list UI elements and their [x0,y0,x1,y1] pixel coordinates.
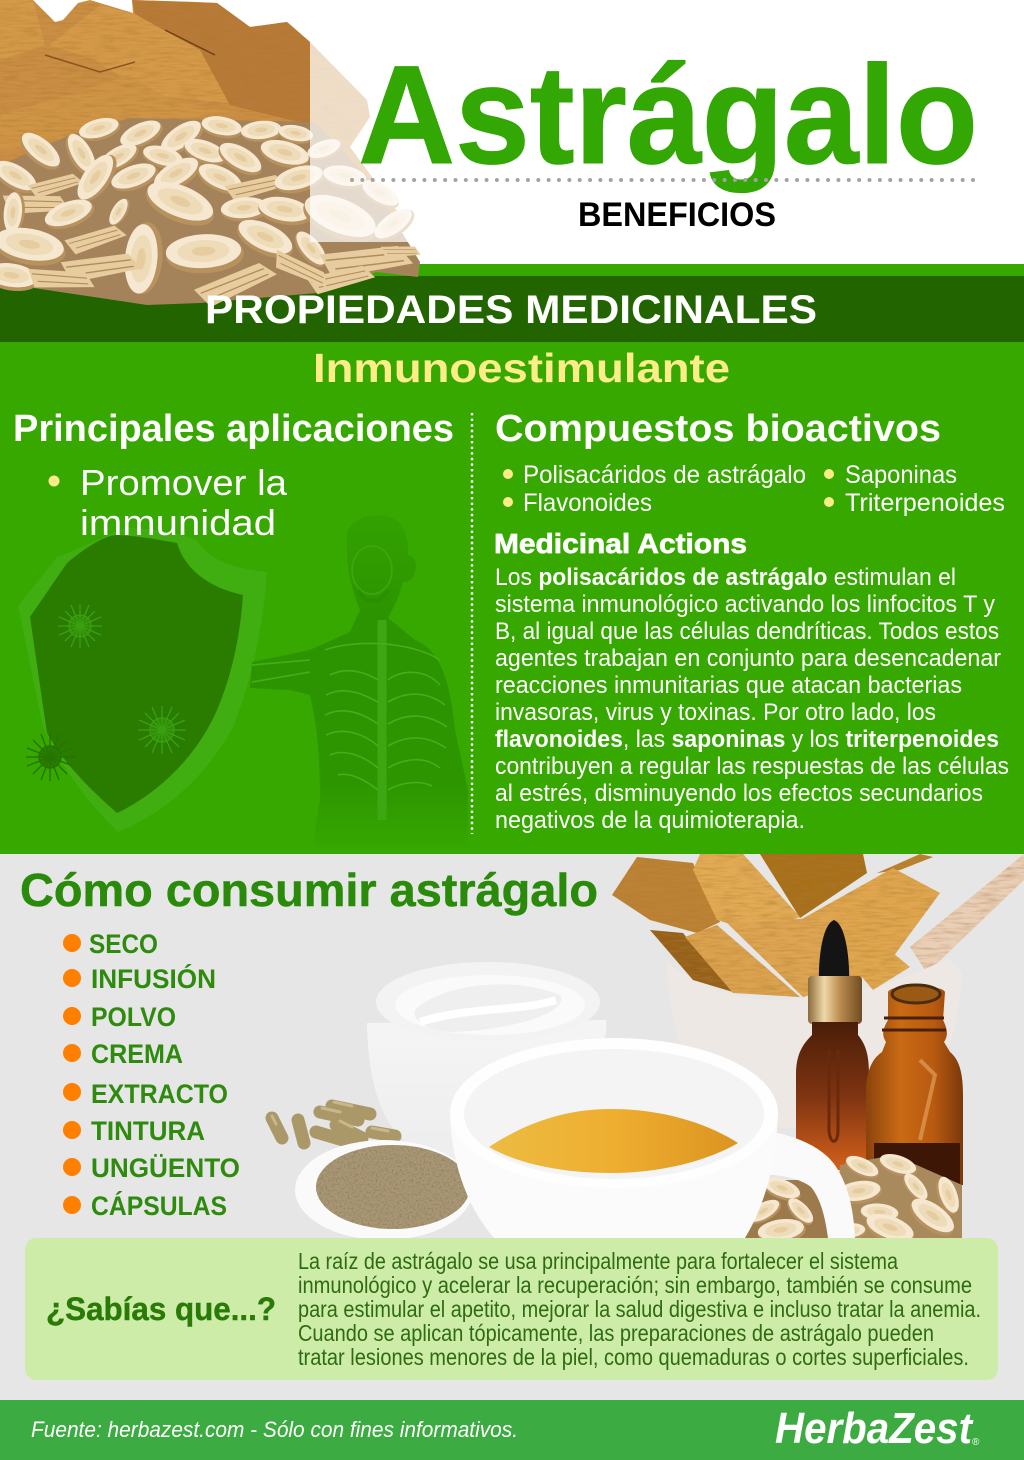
logo: herbazest: HerbaZest [775,1404,974,1453]
medicinal actions text: reacciones inmunitarias que atacan bacterias [495,672,962,699]
footer [0,1400,1024,1460]
bowl of powder [295,1140,473,1240]
application text: Promover la [80,462,288,503]
compound list: Polisacáridos de astrágalo [523,461,806,489]
mortar [667,958,962,1128]
bullet [48,476,60,486]
panel: principales aplicaciones [13,408,468,850]
list: forms of consumption: POLVO [91,1002,176,1032]
application text: immunidad [80,502,276,543]
green section background [0,264,1024,854]
subheading: inmunoestimulante: Inmunoestimulante [313,345,730,391]
amber dropper bottle [796,920,869,1170]
list: forms of consumption: TINTURA [91,1116,205,1146]
photo: astragalus bark and root slices [0,0,440,310]
medicinal actions text: sistema inmunológico activando los linfocitos T y [495,591,995,618]
list: forms of consumption: SECO [89,929,158,959]
dotted rule under title [352,178,976,182]
subtitle: BENEFICIOS [578,196,776,234]
source: Fuente: herbazest.com - Sólo con fines informativos. [31,1417,518,1442]
illustration: shield and viruses [18,528,267,832]
compound list: Saponinas [845,461,957,489]
heading: como consumir: Cómo consumir astrágalo [20,864,598,916]
list: forms of consumption [63,929,240,1221]
section background: como consumir [0,854,1024,1400]
compound list: Flavonoides [523,489,652,517]
compound list: Triterpenoides [845,489,1005,517]
title: Astrágalo [358,36,978,193]
cream jar [367,962,606,1160]
cup handle [738,1133,855,1238]
list: forms of consumption: UNGÜENTO [91,1153,240,1183]
panel: compuestos bioactivos [494,408,1009,834]
medicinal actions text: al estrés, disminuyendo los efectos secundarios [495,780,983,807]
medicinal actions heading: Medicinal Actions [494,528,747,559]
bark pieces [612,854,940,997]
callout text: La raíz de astrágalo se usa principalmente para fortalecer el sistema [298,1248,898,1274]
medicinal actions text: negativos de la quimioterapia. [495,807,805,834]
root slices [745,1150,963,1250]
medicinal actions text: invasoras, virus y toxinas. Por otro lado, los [495,699,936,726]
list: forms of consumption: INFUSIÓN [91,963,216,994]
registered mark: ® [972,1437,980,1448]
list: forms of consumption: CREMA [91,1039,183,1069]
heading: Principales aplicaciones [13,408,454,450]
medicinal actions text: contribuyen a regular las respuestas de las células [495,753,1009,780]
capsules [272,1102,395,1143]
wooden pestle [910,854,1024,973]
fade overlay [310,42,440,242]
compound list [503,461,1005,517]
amber bottle [866,985,963,1185]
callout: sabias que [25,1238,998,1380]
illustration: human skeleton [250,515,468,850]
medicinal actions text [495,564,1009,834]
medicinal actions text: Los polisacáridos de astrágalo estimulan el [495,564,956,591]
divider [471,413,473,834]
list: forms of consumption: EXTRACTO [91,1079,228,1109]
medicinal actions text: flavonoides, las saponinas y los triterpenoides [495,726,999,753]
callout text: Cuando se aplican tópicamente, las preparaciones de astrágalo pueden [298,1320,934,1346]
photo: astragalus products [272,854,1024,1250]
tea cup [450,1038,778,1238]
callout heading: ¿Sabías que...? [46,1291,276,1327]
medicinal actions text: agentes trabajan en conjunto para desencadenar [495,645,1001,672]
callout text [298,1248,981,1370]
medicinal actions text: B, al igual que las células dendríticas. Todos estos [495,618,999,645]
heading: propiedades medicinales: PROPIEDADES MEDICINALES [205,288,817,332]
list: forms of consumption: CÁPSULAS [91,1190,227,1221]
heading: Compuestos bioactivos [495,408,941,450]
application text [80,462,288,543]
section band: propiedades medicinales [0,276,1024,342]
